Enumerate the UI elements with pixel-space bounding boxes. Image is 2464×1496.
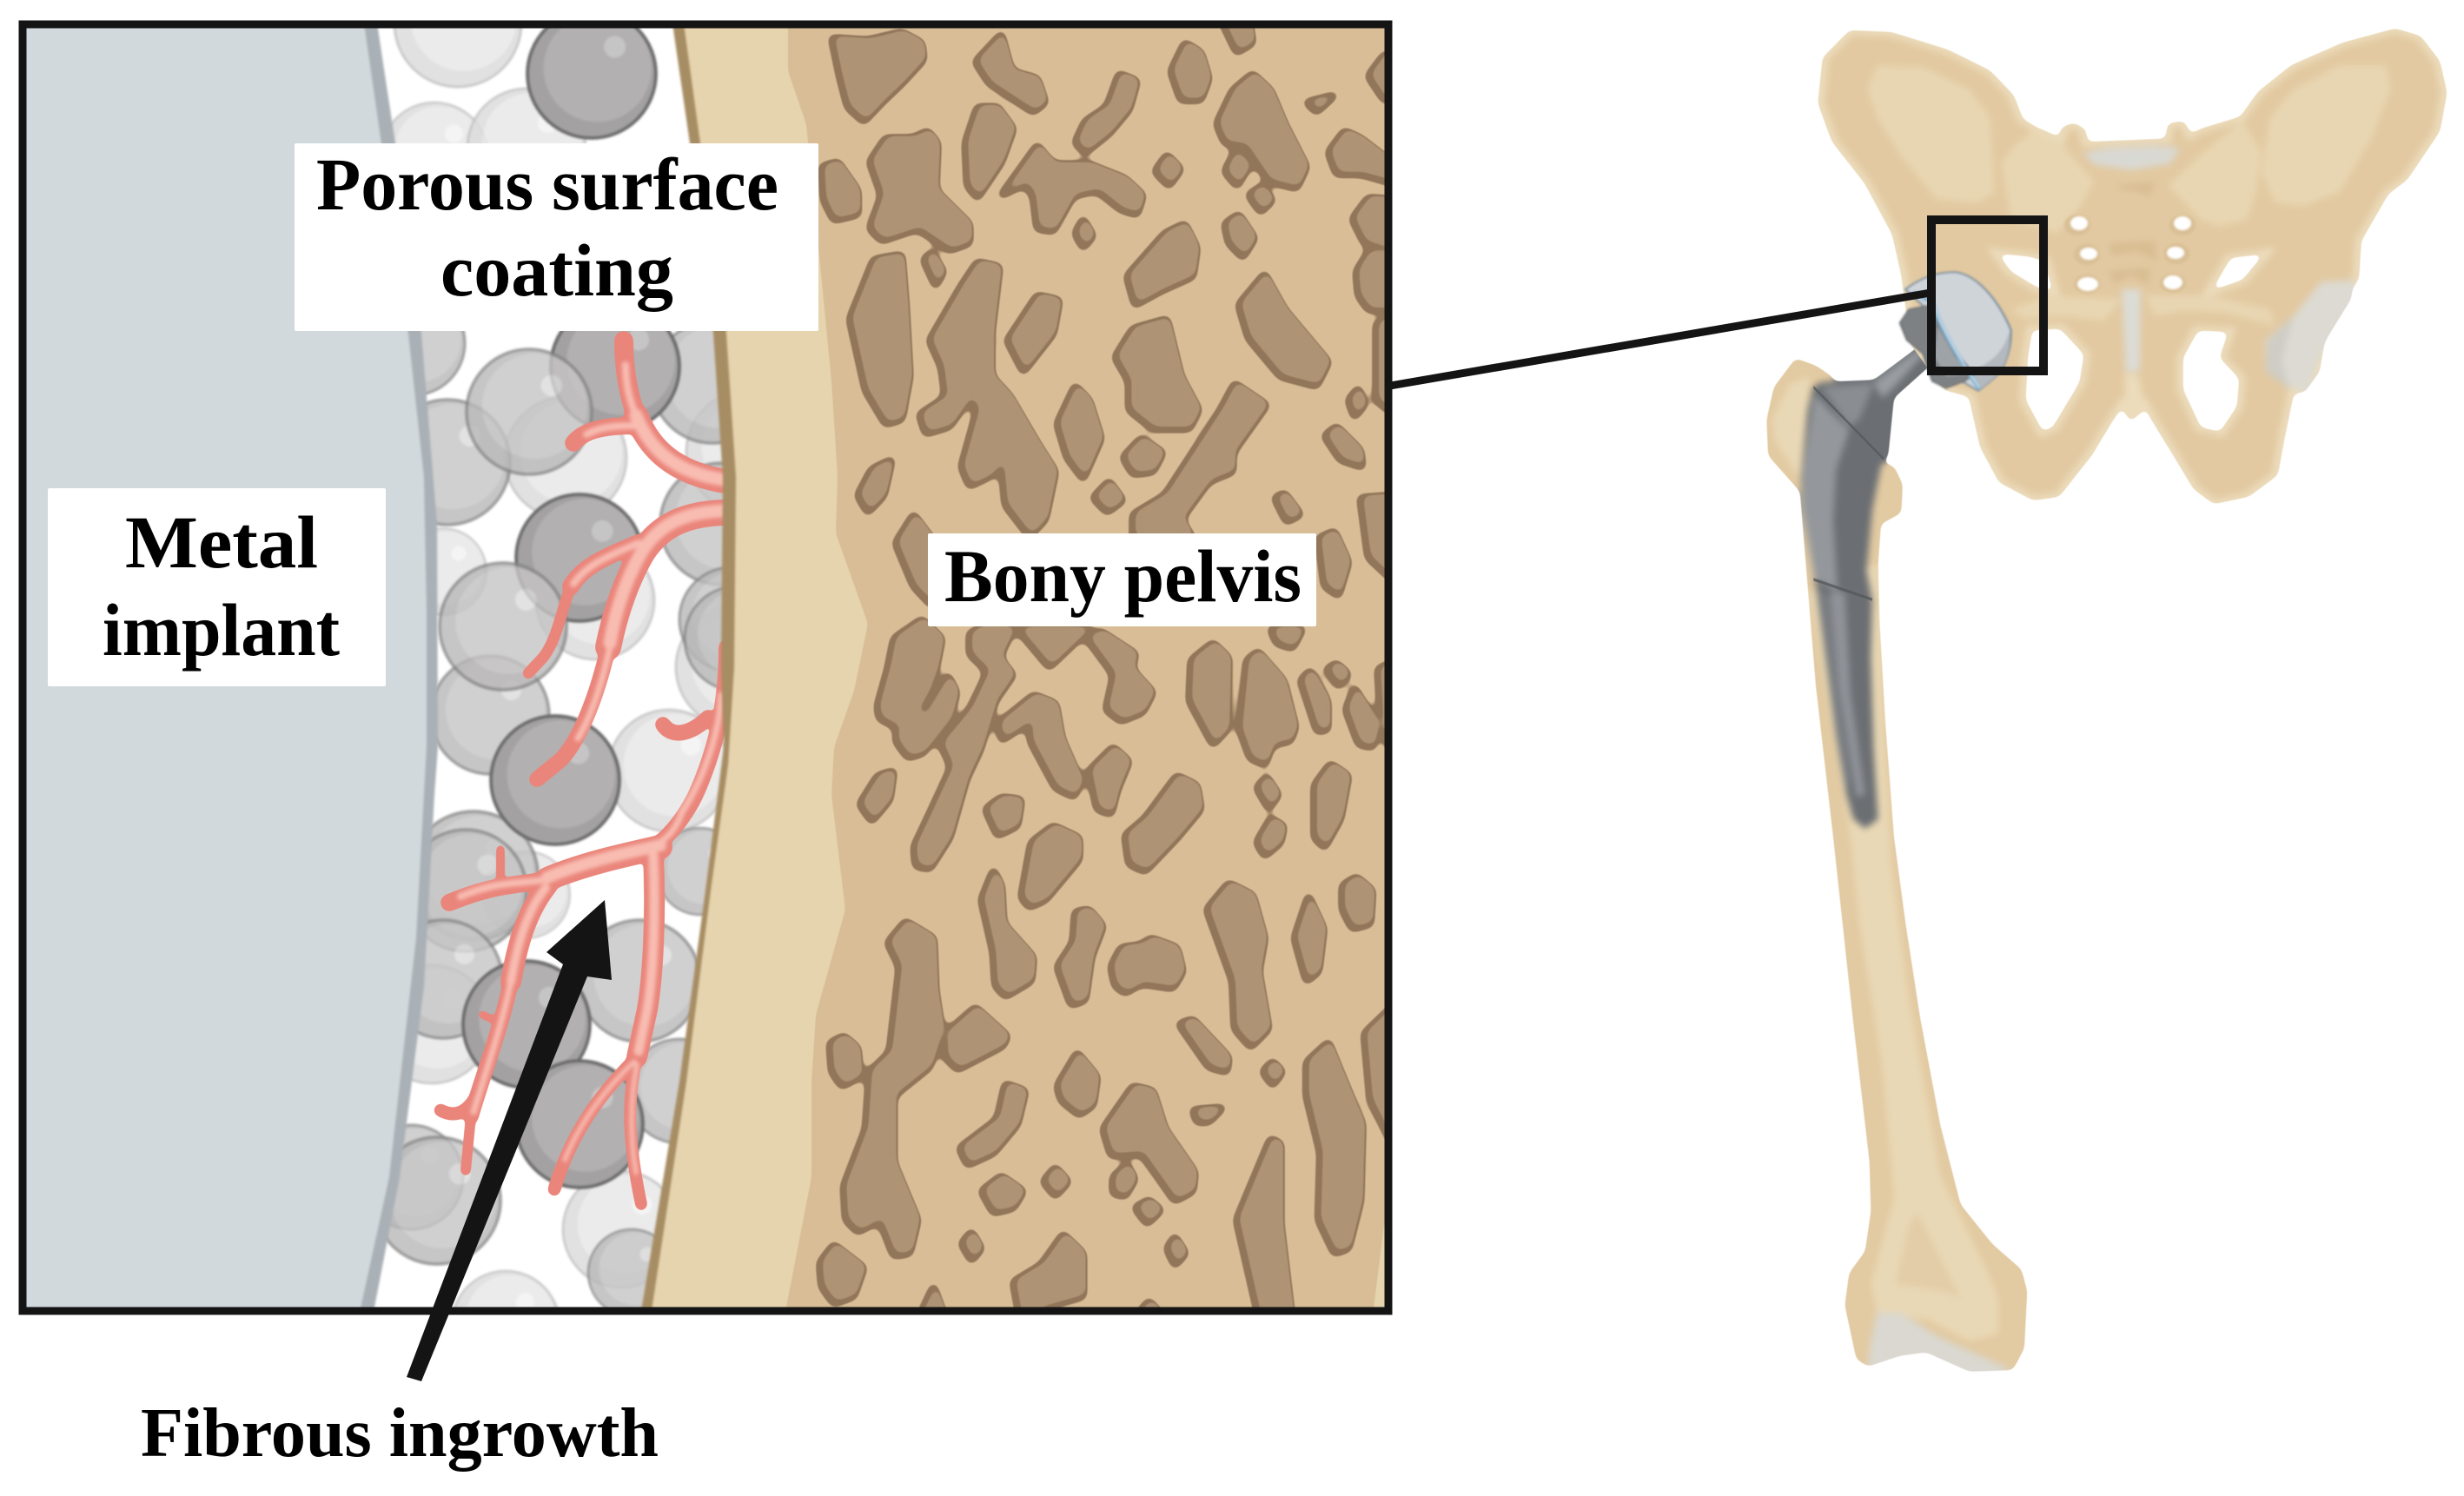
label: bony pelvis: Bony pelvis bbox=[944, 534, 1302, 618]
label: porous surface coating: coating bbox=[440, 228, 673, 312]
porous surface coating spheres bbox=[386, 28, 725, 1307]
acetabular cup implant bbox=[1900, 272, 2011, 391]
arrow: fibrous ingrowth pointer bbox=[407, 900, 612, 1381]
label: metal implant: Metal bbox=[125, 500, 318, 584]
label: porous surface coating bbox=[295, 142, 818, 331]
label: fibrous ingrowth: Fibrous ingrowth bbox=[141, 1395, 659, 1472]
trabecular pores bbox=[820, 17, 1401, 1325]
femoral stem implant bbox=[1801, 333, 1931, 829]
fibrous ingrowth tissue bbox=[440, 341, 739, 1204]
cortical bone layer bbox=[640, 17, 1399, 1316]
ilium fossae bbox=[1867, 65, 2391, 327]
panel: enlarged implant-bone interface bbox=[17, 0, 1408, 1379]
stem edge lines bbox=[1813, 387, 1884, 599]
label: metal implant: implant bbox=[103, 588, 340, 672]
sacral foramina bbox=[2064, 215, 2196, 294]
pelvis bone bbox=[1821, 31, 2444, 501]
connector line from frame to hip bbox=[1390, 293, 1931, 386]
label: porous surface coating: Porous surface bbox=[316, 142, 778, 226]
metal implant body bbox=[17, 17, 438, 1316]
trabecular bone region bbox=[782, 9, 1408, 1329]
label: metal implant bbox=[48, 488, 386, 686]
femur bone bbox=[1766, 333, 2027, 1372]
inset box around hip joint bbox=[1931, 220, 2043, 371]
panel frame bbox=[23, 24, 1388, 1311]
